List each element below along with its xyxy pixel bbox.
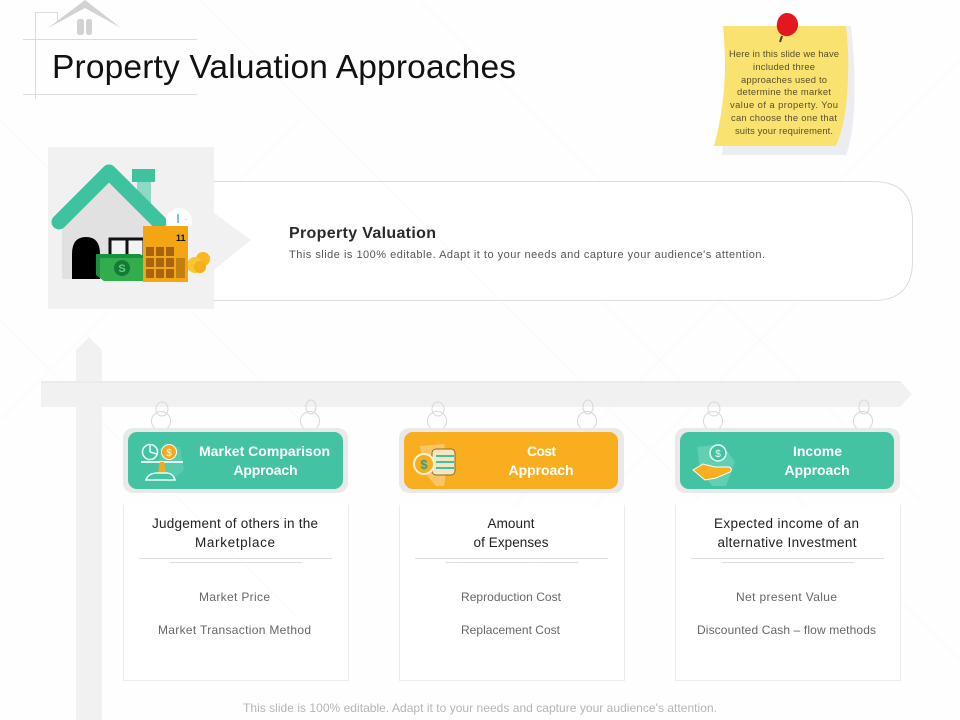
sign: market comparison approach: Market Comparison <box>199 443 330 459</box>
panel: cost details: Amount <box>488 516 535 531</box>
icon: coin stack: $ <box>420 457 428 472</box>
icon: hand holding coin <box>693 444 735 486</box>
icon: coin stack <box>414 444 455 486</box>
icon: house with money and calculator <box>59 169 210 282</box>
sign: income approach <box>675 428 900 493</box>
sign: cost approach: Cost <box>527 443 556 459</box>
icon: red pin <box>777 13 798 42</box>
panel: cost details <box>400 505 624 680</box>
panel: income details <box>676 505 900 680</box>
sticky note text: can choose the one that <box>731 112 837 123</box>
panel: market comparison details: Judgement of others in the <box>152 516 318 531</box>
header house logo <box>23 0 197 99</box>
panel: market comparison details: Market Transaction Method <box>158 623 311 637</box>
panel: market comparison details <box>124 505 348 680</box>
sign: income approach: Approach <box>784 462 850 478</box>
panel heading: Property Valuation <box>289 225 436 242</box>
panel text: This slide is 100% editable. Adapt it to your needs and capture your audience's attention. <box>289 249 765 261</box>
panel: cost details: of Expenses <box>474 535 549 550</box>
sticky note <box>714 13 855 155</box>
icon: balance scale <box>141 444 184 482</box>
icon panel with arrow <box>48 147 251 309</box>
sign: market comparison approach: Approach <box>234 462 298 478</box>
panel: income details: Net present Value <box>736 590 837 604</box>
icon: balance scale: $ <box>166 448 172 459</box>
sticky note text: value of a property. You <box>730 99 838 110</box>
panel: income details: alternative Investment <box>718 535 857 550</box>
panel: income details: Expected income of an <box>714 516 859 531</box>
sticky note text: determine the market <box>737 86 831 97</box>
icon: house with money and calculator: 11 <box>176 233 186 243</box>
panel: cost details: Reproduction Cost <box>461 590 562 604</box>
sign: income approach: Income <box>793 443 842 459</box>
panel: market comparison details: Marketplace <box>195 535 275 550</box>
sticky note text: included three <box>753 61 815 72</box>
title: Property Valuation Approaches <box>52 49 516 86</box>
panel: cost details: Replacement Cost <box>461 623 561 637</box>
signpost <box>41 337 912 720</box>
sign: cost approach: Approach <box>508 462 574 478</box>
footer note: This slide is 100% editable. Adapt it to your needs and capture your audience's attention. <box>243 701 717 715</box>
hanging rings <box>152 400 872 430</box>
sign: market comparison approach <box>123 428 348 493</box>
panel: property valuation <box>48 147 912 309</box>
icon: hand holding coin: $ <box>715 449 721 460</box>
sticky note text: approaches used to <box>741 74 827 85</box>
icon: house with money and calculator: S <box>118 263 126 275</box>
sign: cost approach <box>399 428 624 493</box>
sticky note text <box>729 48 839 136</box>
sticky note text: Here in this slide we have <box>729 48 839 59</box>
panel: market comparison details: Market Price <box>199 590 270 604</box>
sticky note text: suits your requirement. <box>735 125 833 136</box>
panel: income details: Discounted Cash – flow methods <box>697 623 876 637</box>
